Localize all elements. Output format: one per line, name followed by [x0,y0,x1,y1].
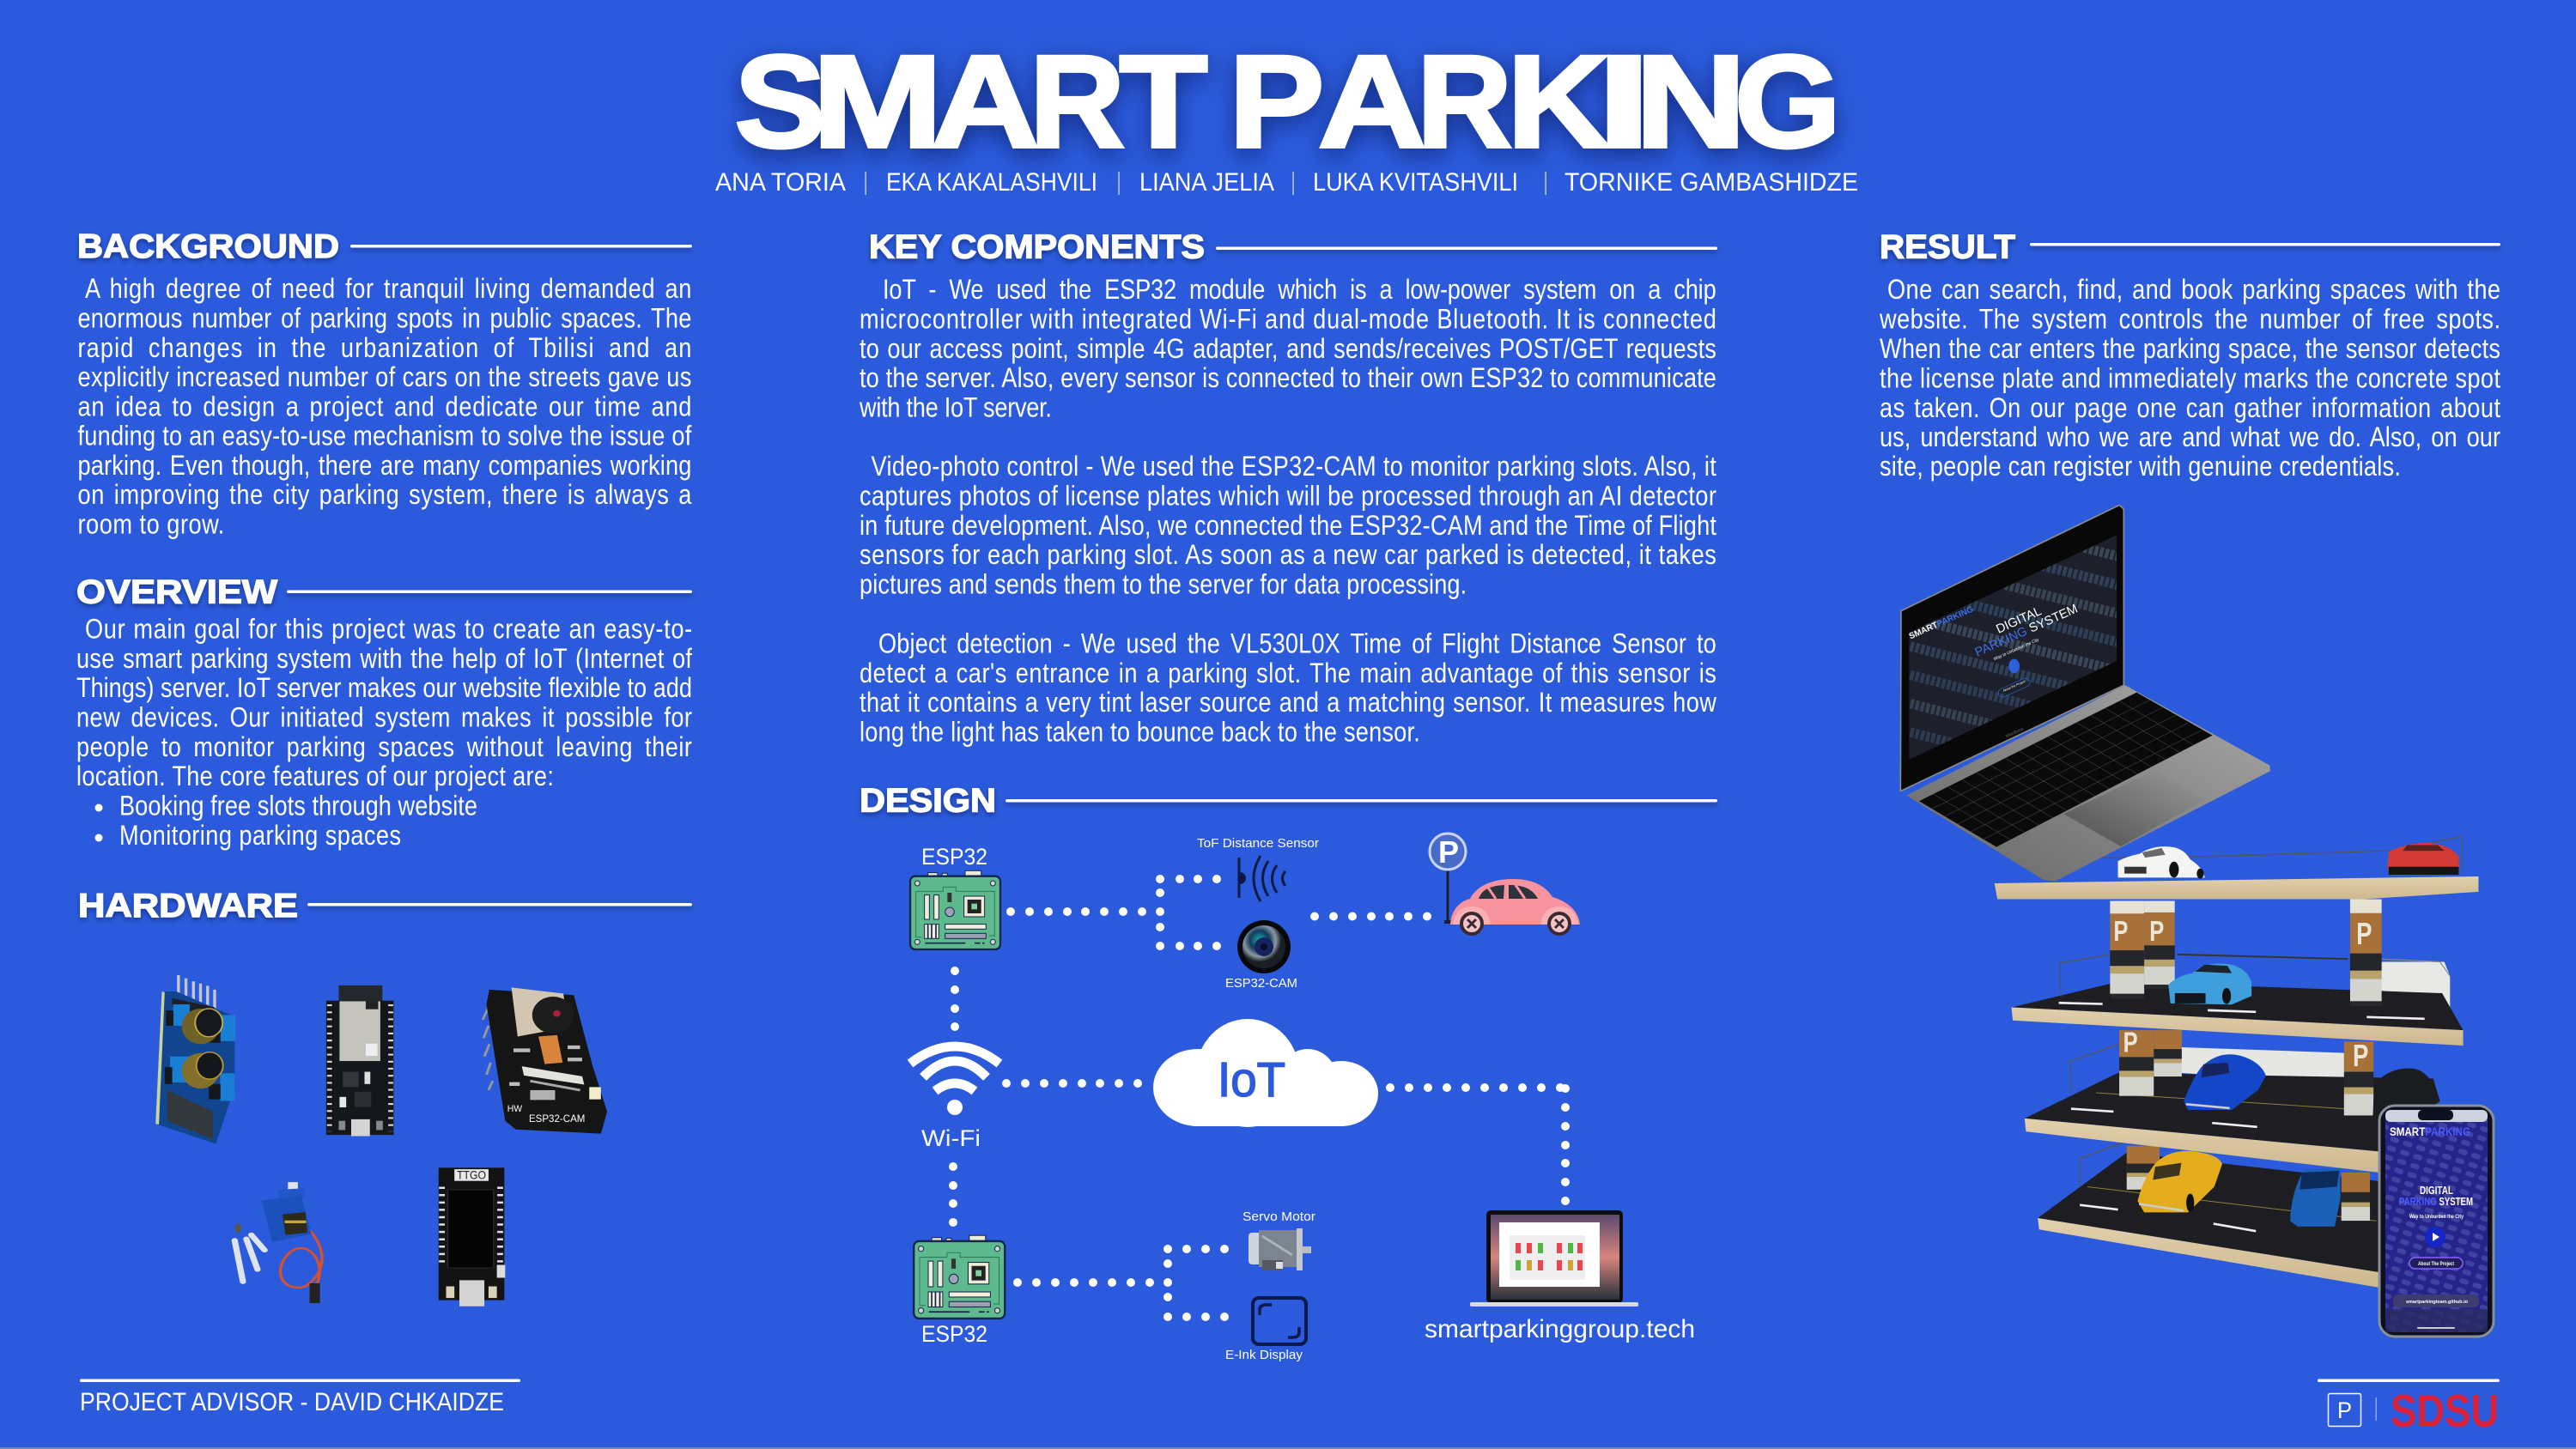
text block: key components: in future development. Also, we connected the ESP32-CAM and the Time of Flight [860,511,1717,542]
text block: key components: that it contains a very tint laser source and a matching sensor. It measures how [860,688,1716,718]
photo: phone showing website: PARKING SYSTEM [2399,1195,2473,1208]
team names: ANA TORIA [715,168,846,197]
team names: LIANA JELIA [1139,168,1274,197]
heading: hardware [78,888,692,925]
icon: wifi [910,1046,999,1115]
text block: background: funding to an easy-to-use mechanism to solve the issue of [77,421,692,452]
yellow car [2137,1151,2222,1212]
icon: e-ink display [1253,1298,1306,1344]
level 3 deck [2025,1027,2440,1173]
text block: result: One can search, find, and book parking spaces with the [1887,275,2500,306]
text block: overview: use smart parking system with the help of IoT (Internet of [76,644,693,675]
team names [715,168,1858,197]
icon: camera lens [1237,920,1291,973]
text block: result: site, people can register with genuine credentials. [1880,452,2401,482]
footer: logos [2318,1379,2500,1437]
label: top ESP32: ESP32 [921,844,987,870]
photo: phone showing website: About The Project [2418,1262,2454,1267]
photo: phone showing website [2379,1106,2494,1337]
title: T [1120,28,1207,175]
icon: ToF distance sensor board [155,975,235,1143]
connector: bottom ESP32 to outputs [1013,1245,1229,1321]
icon: parking sign [1430,834,1466,924]
red sports car [2387,843,2458,875]
light blue sports car [2168,963,2251,1004]
connector: ESP32 to Wi-Fi [951,967,959,1031]
icon: IoT cloud: IoT [1218,1052,1285,1107]
text block: key components: long the light has taken to bounce back to the sensor. [860,717,1420,748]
text block: overview [76,614,693,852]
level 2 deck: P [2113,916,2128,948]
text block: overview: Monitoring parking spaces [119,821,401,852]
label: bottom ESP32: ESP32 [921,1321,987,1347]
heading: result [1880,228,2500,266]
photo: parking garage model [1995,837,2478,1288]
text block: key components: sensors for each parking slot. As soon as a new car parked is detected, it takes [860,540,1716,571]
text block: overview: people to monitor parking spaces without leaving their [76,732,692,763]
heading: hardware: HARDWARE [78,888,298,925]
text block: result: website. The system controls the number of free spots. [1879,305,2500,335]
panel: hardware [78,888,692,1307]
text block: key components: IoT - We used the ESP32 module which is a low-power system on a chip [883,275,1716,306]
panel: key components [859,228,1717,748]
photo: laptop showing website [1889,498,2270,882]
text block: overview: Booking free slots through website [119,791,477,822]
icon: servo motor [1249,1228,1311,1270]
icon: ESP32-CAM board [483,987,607,1134]
title [735,28,1841,175]
text block: key components: detect a car's entrance in a parking slot. The main advantage of this sensor is [860,658,1716,689]
text block: background [77,274,692,540]
label: e-ink display: E-Ink Display [1225,1348,1303,1362]
text block: overview: location. The core features of our project are: [76,761,554,792]
icon: parking sign: P [1438,834,1459,870]
connector: sensors to car [1310,912,1431,920]
level 4 deck [2038,1141,2379,1288]
text block: background: parking. Even though, there are many companies working [77,451,691,481]
title: A [1318,28,1426,175]
icon: ESP32-CAM board: ESP32-CAM [529,1113,585,1125]
text block: key components: to the server. Also, every sensor is connected to their own ESP32 to communicate [860,363,1716,394]
heading: overview: OVERVIEW [76,573,277,611]
level 3 deck: P [2353,1038,2368,1073]
panel: design diagram [860,783,1717,1362]
text block: background: room to grow. [77,509,224,540]
footer: logos: P [2337,1397,2352,1423]
laptop base [1906,685,2270,882]
title: R [1417,28,1512,175]
text block: key components: to our access point, simple 4G adapter, and sends/receives POST/GET requests [860,334,1716,365]
icon: bottom ESP32 board [914,1235,1005,1319]
connector: Wi-Fi to bottom ESP32 [949,1162,957,1227]
text block: background: A high degree of need for tranquil living demanded an [85,274,691,305]
connector: top ESP32 to sensors [1006,875,1221,950]
title: K [1507,28,1610,175]
connector: cloud to website [1386,1083,1570,1205]
text block: overview: new devices. Our initiated system makes it possible for [76,702,692,733]
text block: background: rapid changes in the urbanization of Tbilisi and an [77,333,691,363]
heading: background: BACKGROUND [77,228,339,265]
team names: TORNIKE GAMBASHIDZE [1564,168,1858,197]
label: ToF distance sensor: ToF Distance Sensor [1197,836,1319,851]
icon: ESP32-CAM board: HW [507,1103,522,1113]
level 3 deck: P [2123,1027,2138,1058]
photo: phone showing website: DIGITAL [2420,1184,2453,1197]
heading: result: RESULT [1880,228,2015,266]
panel: background [77,228,692,540]
heading: key components: KEY COMPONENTS [869,228,1205,266]
panel: result [1879,228,2501,1337]
laptop screen: SMARTPARKING [1908,604,1975,641]
laptop screen: PARKING SYSTEM [1973,602,2080,660]
icon: IoT cloud [1153,1019,1378,1127]
footer: logos: SDSU [2391,1385,2499,1437]
level 2 deck [2012,900,2464,1046]
text block: result: the license plate and immediately marks the concrete spot [1880,364,2501,394]
icon: laptop with dashboard [1470,1210,1638,1307]
text block: key components: pictures and sends them to the server for data processing. [860,569,1467,600]
icon: ESP32 board [326,985,393,1137]
text block: overview: Our main goal for this project was to create an easy-to- [85,614,692,645]
title: A [931,28,1039,175]
connector: Wi-Fi to cloud [1002,1079,1142,1088]
level 2 deck: P [2149,916,2164,948]
label: servo motor: Servo Motor [1242,1210,1315,1224]
laptop screen: DIGITAL [1994,604,2044,637]
footer: project advisor: PROJECT ADVISOR - DAVID CHKAIDZE [80,1388,504,1416]
text block: result [1879,275,2501,482]
icon: TTGO display board: TTGO [457,1169,486,1182]
text block: background: enormous number of parking spots in public spaces. The [77,303,691,334]
heading: design [860,783,1717,819]
label: ESP32-CAM: ESP32-CAM [1225,976,1297,991]
laptop screen [1899,505,2124,791]
title: P [1229,28,1324,175]
heading: key components [869,228,1717,266]
top deck [1995,837,2478,900]
icon: top ESP32 board [910,870,1000,949]
text block: result: When the car enters the parking space, the sensor detects [1880,334,2500,365]
text block: background: explicitly increased number of cars on the streets gave us [77,362,691,393]
text block: key components: Video-photo control - We used the ESP32-CAM to monitor parking slots. Also, it [871,452,1716,482]
title: I [1596,28,1651,175]
heading: overview [76,573,692,611]
dark blue car [2290,1168,2341,1227]
text block: result: as taken. On our page one can gather information about [1880,393,2501,424]
icon: TTGO display board [439,1167,505,1307]
level 2 deck: P [2356,916,2372,951]
heading: background [77,228,692,265]
title: R [1030,28,1125,175]
title: S [735,28,826,175]
photo: phone showing website: Way to Unburden the City [2409,1215,2464,1220]
photo: phone showing website: SMARTPARKING [2390,1125,2470,1138]
label: website URL: smartparkinggroup.tech [1425,1315,1695,1343]
heading: design: DESIGN [860,783,996,819]
label: Wi-Fi: Wi-Fi [921,1125,981,1151]
icon: servo motor kit [234,1182,322,1303]
laptop screen: MacBook [2005,726,2025,739]
white sports car [2118,846,2205,879]
icon: ToF sensor waves [1239,856,1285,901]
text block: key components: Object detection - We used the VL530L0X Time of Flight Distance Sensor to [878,628,1716,659]
black car [2372,1068,2440,1121]
text block: key components: captures photos of license plates which will be processed through an AI detector [860,481,1716,512]
photo: phone showing website: smartparkingteam.github.io [2406,1300,2468,1305]
laptop screen: Way to Unburden the City [1993,637,2040,662]
team names: LUKA KVITASHVILI [1313,168,1518,197]
text block: key components: microcontroller with integrated Wi-Fi and dual-mode Bluetooth. It is connected [860,304,1716,335]
title: M [812,28,943,175]
title: N [1635,28,1747,175]
text block: key components [859,275,1717,748]
text block: overview: Things) server. IoT server makes our website flexible to add [76,673,692,704]
text block: background: on improving the city parking system, there is always a [77,480,692,511]
text block: background: an idea to design a project and dedicate our time and [77,391,691,422]
panel: overview [76,573,693,852]
text block: key components: with the IoT server. [859,392,1052,423]
team names: EKA KAKALASHVILI [886,168,1097,197]
laptop screen: About the Project [2002,680,2026,693]
blue beetle [2184,1054,2266,1110]
title: G [1735,28,1841,175]
text block: result: us, understand who we are and what we do. Also, on our [1880,422,2500,453]
icon: pink car [1450,879,1580,934]
hardware photos [155,975,607,1307]
